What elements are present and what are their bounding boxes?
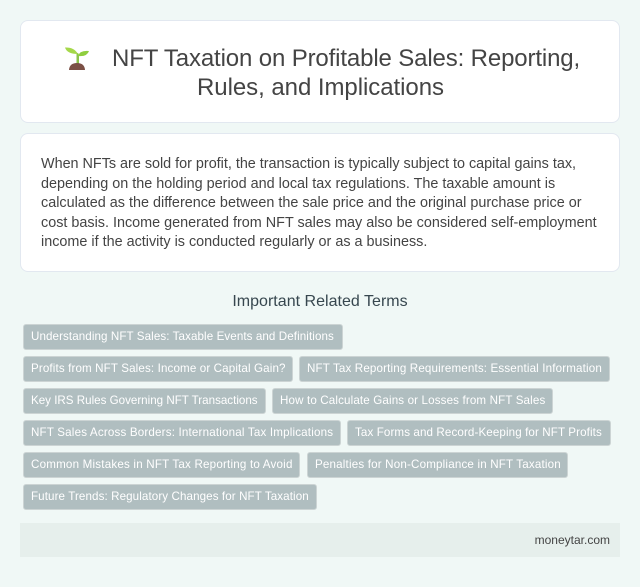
panel: title card	[20, 20, 620, 123]
description text: depending on the holding period and local tax regulations. The taxable amount is	[41, 176, 555, 192]
tag: Penalties for Non-Compliance in NFT Taxation	[315, 458, 561, 471]
tag	[23, 324, 343, 350]
tag	[272, 388, 553, 414]
tag: Profits from NFT Sales: Income or Capital Gain?	[31, 362, 286, 375]
tag	[23, 356, 293, 382]
tag: Key IRS Rules Governing NFT Transactions	[31, 394, 258, 407]
title: NFT Taxation on Profitable Sales: Reporting,	[112, 45, 580, 72]
footer text: moneytar.com	[535, 533, 610, 547]
tag: How to Calculate Gains or Losses from NFT Sales	[280, 394, 545, 407]
description text: income if the activity is conducted regularly or as a business.	[41, 234, 427, 250]
icon: sprout	[65, 48, 89, 70]
tag: NFT Tax Reporting Requirements: Essential Information	[307, 362, 602, 375]
tag	[307, 452, 568, 478]
title: Rules, and Implications	[197, 74, 444, 101]
description text: When NFTs are sold for profit, the transaction is typically subject to capital gains tax,	[41, 156, 576, 172]
tag	[23, 388, 266, 414]
footer bar	[20, 523, 620, 557]
description text: cost basis. Income generated from NFT sales may also be considered self-employment	[41, 215, 597, 231]
tag	[23, 452, 300, 478]
tag: NFT Sales Across Borders: International Tax Implications	[31, 426, 333, 439]
description text: calculated as the difference between the sale price and the original purchase price or	[41, 195, 582, 211]
tag	[347, 420, 611, 446]
description text	[41, 156, 597, 250]
tag	[23, 484, 317, 510]
title	[112, 45, 580, 101]
tag	[299, 356, 610, 382]
tag list	[23, 324, 611, 510]
heading: related terms: Important Related Terms	[232, 293, 408, 310]
tag	[23, 420, 341, 446]
tag: Understanding NFT Sales: Taxable Events and Definitions	[31, 330, 334, 343]
panel: description	[20, 133, 620, 272]
tag: Tax Forms and Record-Keeping for NFT Profits	[355, 426, 602, 439]
tag: Future Trends: Regulatory Changes for NFT Taxation	[31, 490, 309, 503]
tag: Common Mistakes in NFT Tax Reporting to Avoid	[31, 458, 293, 471]
